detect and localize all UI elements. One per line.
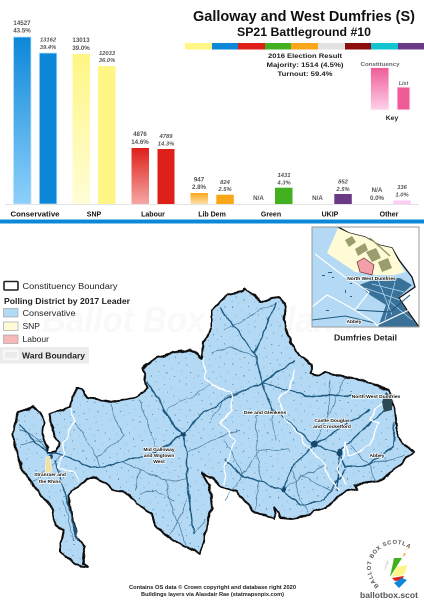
ward labels: Stranraer and	[34, 472, 66, 478]
site name: ballotbox.scot	[360, 590, 418, 600]
bar chart	[5, 20, 419, 218]
Green bar: 4.3%	[276, 180, 291, 186]
Other bar: 0.0%	[370, 195, 385, 202]
Labour bars: 14.3%	[158, 142, 174, 148]
title	[193, 8, 415, 39]
land with constituency boundary	[13, 288, 414, 567]
Lib Dem bars: 824	[220, 180, 231, 186]
Labour bars: 4789	[159, 134, 173, 140]
section divider	[0, 220, 424, 224]
party labels: UKIP	[322, 212, 339, 218]
Other bar	[370, 185, 411, 204]
SNP district in Stranraer	[45, 456, 52, 473]
Other bar: 1.0%	[395, 192, 409, 198]
Conservative bars: 13162	[40, 38, 57, 44]
Conservative bars: 39.4%	[40, 45, 56, 51]
ward boundary key: Ward Boundary	[22, 350, 85, 360]
Labour district	[357, 258, 374, 275]
towns	[48, 432, 342, 492]
inset caption: Dumfries Detail	[334, 332, 397, 342]
election result text: 2016 Election Result	[268, 53, 343, 60]
Green bar	[253, 173, 292, 204]
title: Galloway and West Dumfries (S)	[193, 8, 415, 25]
minor roads	[20, 303, 405, 547]
party labels: Green	[261, 212, 281, 218]
footer credits: Contains OS data © Crown copyright and database right 2020	[129, 584, 296, 591]
UKIP bar: 2.5%	[335, 187, 350, 193]
footer credits	[129, 584, 296, 598]
footer credits: Buildings layers via Alasdair Rae (statmapsnpix.com)	[141, 592, 284, 598]
Other bar: 336	[397, 185, 408, 191]
party labels: Conservative	[10, 212, 60, 218]
party labels: Lib Dem	[198, 212, 226, 218]
conservative key: Conservative	[22, 308, 76, 318]
legend	[0, 281, 131, 364]
key: List	[399, 81, 408, 87]
Other bar: N/A	[372, 187, 383, 194]
Lib Dem bars: 2.8%	[192, 184, 207, 191]
ward labels	[34, 394, 401, 485]
party labels	[10, 212, 399, 218]
UKIP bar: 852	[338, 180, 349, 186]
SNP bars: 39.0%	[72, 45, 90, 52]
Conservative bars: 14527	[13, 20, 31, 27]
Labour bars	[131, 131, 174, 204]
party labels: Labour	[141, 212, 165, 218]
key: Constituency	[360, 62, 400, 68]
ward labels: Mid Galloway	[143, 447, 175, 453]
SNP key: SNP	[22, 321, 40, 331]
inset labels: North West Dumfries	[347, 276, 396, 282]
election result text: Turnout: 59.4%	[278, 71, 333, 78]
Lib Dem bars	[190, 176, 234, 204]
main constituency map	[13, 288, 414, 567]
SNP bars: 12033	[99, 51, 116, 57]
built-up area	[345, 236, 392, 272]
key	[360, 62, 410, 122]
baseline	[5, 203, 419, 206]
UKIP bar	[312, 180, 352, 204]
party colour stripe	[185, 43, 424, 50]
ward labels: North West Dumfries	[352, 394, 401, 400]
SNP bars	[72, 37, 116, 204]
Labour key: Labour	[22, 334, 49, 344]
ward boundaries	[58, 358, 385, 490]
ward labels: the Rhins	[39, 479, 61, 485]
Green bar: 1431	[278, 173, 290, 179]
Dumfries south urban area	[359, 278, 418, 327]
Conservative bars: 43.5%	[13, 28, 31, 34]
Conservative bars	[13, 20, 57, 204]
inset frame	[312, 227, 419, 327]
party labels: Other	[380, 212, 399, 218]
Labour bars: 14.6%	[131, 139, 149, 146]
logo: Ballot Box Scotland: BALLOT BOX SCOTLAND	[366, 540, 410, 588]
polling district heading: Polling District by 2017 Leader	[4, 296, 131, 306]
ward labels: West	[153, 459, 165, 465]
watermark: Ballot Box Scotland	[42, 299, 355, 340]
constituency boundary key: Constituency Boundary	[22, 281, 118, 291]
inset map: Dumfries detail: Abbey	[347, 319, 362, 325]
outside boundary area	[338, 228, 418, 326]
scattered buildings	[322, 272, 352, 311]
ward labels: and Wigtown	[144, 453, 174, 459]
inset map: Dumfries detail	[312, 226, 420, 340]
election result text: Majority: 1514 (4.5%)	[266, 62, 344, 69]
ward labels: Castle Douglas	[314, 418, 350, 424]
SNP district	[327, 228, 405, 275]
Labour bars: 4876	[133, 131, 147, 138]
party labels: SNP	[87, 212, 102, 218]
ward labels: Dee and Glenkens	[244, 410, 286, 416]
ward labels: Abbey	[370, 453, 385, 459]
election result text	[266, 53, 344, 78]
building dots	[13, 288, 414, 567]
main roads	[20, 303, 394, 540]
roads	[312, 277, 410, 323]
Green bar: N/A	[253, 195, 264, 202]
subtitle: SP21 Battleground #10	[237, 27, 371, 39]
ward labels: and Crocketford	[313, 424, 351, 430]
ward lines	[312, 254, 409, 327]
key: Key	[386, 115, 398, 122]
SNP bars: 36.0%	[99, 58, 115, 64]
Lib Dem bars: 2.5%	[217, 187, 232, 193]
UKIP bar: N/A	[312, 195, 323, 202]
Dumfries urban patch	[382, 392, 392, 412]
SNP bars: 13013	[72, 37, 90, 44]
Lib Dem bars: 947	[194, 176, 205, 184]
